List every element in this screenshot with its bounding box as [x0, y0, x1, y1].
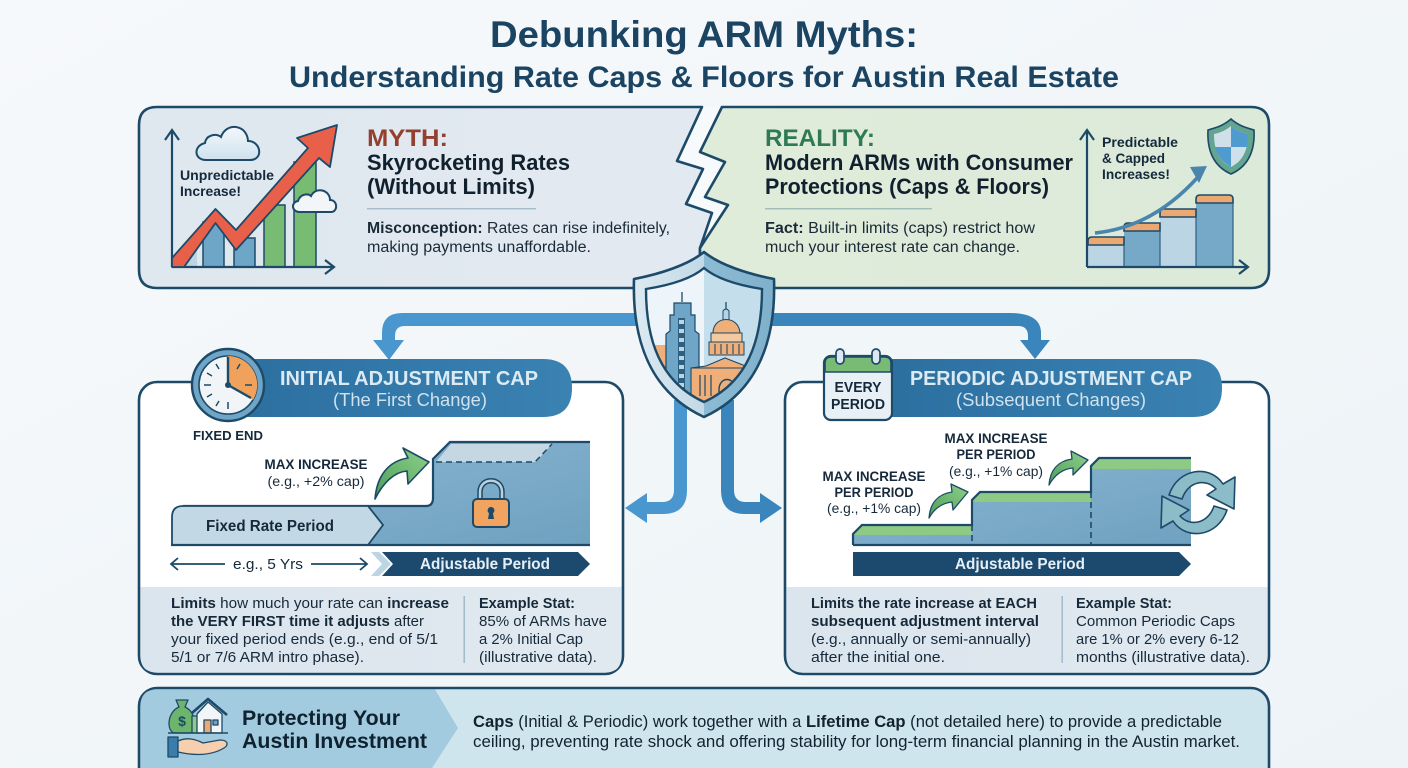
- myth heading: MYTH:: [367, 125, 448, 152]
- chart: first rate step: [171, 442, 590, 545]
- label: max increase: [264, 457, 368, 489]
- icon: lock: [473, 481, 509, 527]
- adjustable period bar: [382, 552, 590, 576]
- arrow: shield to periodic cap: [770, 313, 1050, 359]
- icon: Austin shield: [634, 252, 774, 417]
- fixed rate period: [172, 506, 383, 545]
- reality description: Fact: Built-in limits (caps) restrict how: [765, 220, 1036, 237]
- periodic cap example stat: are 1% or 2% every 6-12: [1076, 631, 1239, 648]
- myth description: Misconception: Rates can rise indefinitely,: [367, 220, 670, 237]
- reality heading: Protections (Caps & Floors): [765, 174, 1049, 199]
- title: Understanding Rate Caps & Floors for Austin Real Estate: [289, 61, 1119, 94]
- reality heading: Modern ARMs with Consumer: [765, 150, 1073, 175]
- icon: money, house and hand: [168, 699, 228, 757]
- initial cap example stat: [479, 595, 607, 666]
- adjustable period bar: Adjustable Period: [955, 556, 1085, 573]
- reality description: much your interest rate can change.: [765, 239, 1020, 256]
- reality description: [765, 220, 1036, 256]
- label: second max increase: (e.g., +1% cap): [949, 463, 1043, 479]
- periodic cap explanation: (e.g., annually or semi-annually): [811, 631, 1031, 648]
- myth description: making payments unaffordable.: [367, 239, 591, 256]
- label: second max increase: [944, 431, 1048, 479]
- reality heading: REALITY:: [765, 125, 875, 152]
- periodic cap explanation: after the initial one.: [811, 649, 945, 666]
- reality heading: [765, 125, 1073, 199]
- icon: clock: [192, 349, 264, 421]
- label: predictable and capped: Increases!: [1102, 167, 1170, 182]
- adjustable period bar: Adjustable Period: [420, 556, 550, 573]
- header pill: [880, 359, 1222, 417]
- periodic cap example stat: Common Periodic Caps: [1076, 613, 1235, 630]
- icon: protection shield: [1208, 119, 1254, 174]
- summary text: ceiling, preventing rate shock and offering stability for long-term financial planning in the Austin market.: [473, 733, 1240, 751]
- title: [289, 14, 1119, 94]
- label: predictable and capped: [1102, 135, 1179, 182]
- skyline: [655, 292, 744, 400]
- arrow: shield to initial cap: [373, 313, 640, 360]
- label: second max increase: PER PERIOD: [956, 447, 1036, 462]
- label: first max increase: (e.g., +1% cap): [827, 500, 921, 516]
- adjustable period bar: [853, 552, 1191, 576]
- heading: protecting your Austin investment: Austin Investment: [242, 729, 427, 753]
- myth heading: Skyrocketing Rates: [367, 150, 570, 175]
- header pill: [228, 359, 572, 417]
- arrow: shield to right card: [721, 400, 782, 523]
- timeline: five years: [171, 552, 391, 576]
- label: unpredictable increase: [180, 168, 274, 199]
- panel: periodic adjustment cap: [785, 349, 1269, 674]
- timeline: five years: e.g., 5 Yrs: [233, 556, 303, 573]
- lightning divider: [677, 107, 728, 248]
- label: max increase: MAX INCREASE: [264, 457, 368, 472]
- icon: calendar: [824, 349, 892, 420]
- panel: myth: [139, 107, 712, 288]
- header pill: INITIAL ADJUSTMENT CAP: [280, 367, 538, 390]
- chart: capped steps: [1080, 119, 1254, 274]
- header pill: (Subsequent Changes): [956, 389, 1146, 410]
- label: second max increase: MAX INCREASE: [944, 431, 1048, 446]
- heading: protecting your Austin investment: Protecting Your: [242, 706, 401, 730]
- arrow: shield to left card: [625, 400, 687, 523]
- periodic cap explanation: Limits the rate increase at EACH: [811, 595, 1037, 612]
- myth heading: (Without Limits): [367, 174, 535, 199]
- arrow: second step: [1049, 451, 1088, 485]
- periodic cap example stat: [1076, 595, 1250, 666]
- periodic cap explanation: [811, 595, 1039, 666]
- periodic cap explanation: subsequent adjustment interval: [811, 613, 1039, 630]
- initial cap example stat: 85% of ARMs have: [479, 613, 607, 630]
- chart: unpredictable rates: [165, 125, 337, 274]
- panel: protecting your investment: [139, 688, 1269, 768]
- icon: calendar: EVERY: [834, 380, 882, 396]
- label: first max increase: [822, 469, 926, 516]
- label: max increase: (e.g., +2% cap): [268, 473, 364, 489]
- initial cap explanation: Limits how much your rate can increase: [171, 595, 449, 612]
- myth heading: [367, 125, 570, 199]
- initial cap explanation: the VERY FIRST time it adjusts after: [171, 613, 424, 630]
- myth description: [367, 220, 670, 256]
- icon: cloud: [196, 127, 259, 160]
- arrow: rising rates: [172, 125, 337, 267]
- label: predictable and capped: Predictable: [1102, 135, 1179, 150]
- label: predictable and capped: & Capped: [1102, 151, 1165, 166]
- icon: cycle arrows: [1161, 471, 1235, 534]
- label: unpredictable increase: Increase!: [180, 184, 241, 199]
- initial cap example stat: Example Stat:: [479, 595, 575, 612]
- header pill: (The First Change): [333, 390, 487, 410]
- fixed rate period: Fixed Rate Period: [206, 518, 334, 535]
- panel: initial adjustment cap: [139, 349, 623, 674]
- initial cap example stat: (illustrative data).: [479, 649, 597, 666]
- summary text: [473, 713, 1240, 751]
- label: first max increase: PER PERIOD: [834, 485, 914, 500]
- panel: reality: [700, 107, 1269, 288]
- icon: calendar: PERIOD: [831, 397, 885, 413]
- initial cap explanation: your fixed period ends (e.g., end of 5/1: [171, 631, 438, 648]
- initial cap explanation: 5/1 or 7/6 ARM intro phase).: [171, 649, 364, 666]
- arrow: first step: [929, 484, 968, 518]
- arrow: predictable trend: [1095, 166, 1207, 233]
- chart: periodic steps: [822, 431, 1235, 545]
- periodic cap example stat: months (illustrative data).: [1076, 649, 1250, 666]
- icon: money, house and hand: $: [178, 713, 186, 729]
- initial cap example stat: a 2% Initial Cap: [479, 631, 583, 648]
- periodic cap example stat: Example Stat:: [1076, 595, 1172, 612]
- heading: protecting your Austin investment: [242, 706, 427, 753]
- footer background: [786, 587, 1268, 672]
- summary text: Caps (Initial & Periodic) work together with a Lifetime Cap (not detailed here) to provide a predictable: [473, 713, 1222, 731]
- initial cap explanation: [171, 595, 449, 666]
- title: Debunking ARM Myths:: [490, 14, 918, 55]
- arrow: max increase: [375, 448, 429, 499]
- header pill: PERIODIC ADJUSTMENT CAP: [910, 367, 1192, 390]
- label: unpredictable increase: Unpredictable: [180, 168, 274, 183]
- label: fixed end: FIXED END: [193, 428, 263, 443]
- label: first max increase: MAX INCREASE: [822, 469, 926, 484]
- icon: small cloud: [293, 190, 336, 212]
- footer background: [140, 587, 622, 672]
